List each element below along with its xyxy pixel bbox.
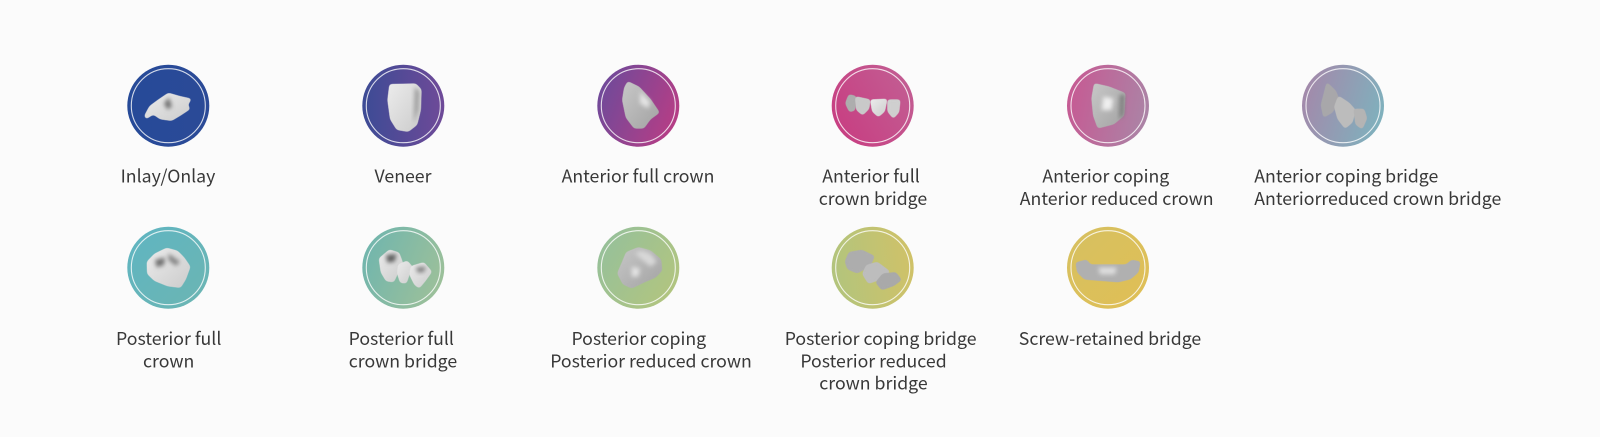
item: Posterior full crown: crown [143,348,194,374]
icon: anterior full crown [597,65,679,147]
item: Veneer [362,65,444,189]
icon: posterior coping [597,227,679,309]
icon: veneer [362,65,444,147]
label: Posterior coping bridge [785,325,977,351]
icon: screw-retained bridge [1067,227,1149,309]
item: Posterior coping bridge / reduced crown bridge: crown bridge [819,370,928,396]
item: Anterior coping bridge / reduced crown bridge: Anteriorreduced crown bridge [1254,185,1501,211]
item: Anterior full crown bridge: crown bridge [819,185,927,211]
item: Posterior coping / reduced crown: Posterior reduced crown [550,348,752,374]
item: Posterior coping bridge / reduced crown bridge: Posterior reduced [800,348,947,374]
item: Inlay/Onlay [121,65,215,189]
icon: anterior coping bridge [1302,65,1384,147]
icon: anterior full crown bridge [832,65,914,147]
item: Posterior coping bridge / reduced crown bridge [785,227,977,396]
icon: posterior coping bridge [832,227,914,309]
item: Posterior full crown bridge: crown bridge [349,348,457,374]
icon: posterior full crown [127,227,209,309]
label: Veneer [375,163,432,189]
label: Anterior coping bridge [1254,163,1439,189]
item: Anterior coping / reduced crown: Anterior reduced crown [1020,185,1214,211]
label: Posterior full [349,325,454,351]
item: Posterior full crown bridge [349,227,457,374]
item: Anterior full crown bridge [819,65,927,211]
item: Screw-retained bridge [1019,227,1201,351]
label: Anterior full [822,163,920,189]
label: Posterior full [116,325,221,351]
label: Anterior full crown [562,163,714,189]
icon: anterior coping [1067,65,1149,147]
label: Screw-retained bridge [1019,325,1201,351]
item: Posterior full crown [116,227,221,374]
item: Anterior coping bridge / reduced crown bridge [1254,65,1501,211]
icon: inlay/onlay [127,65,209,147]
icon: posterior full crown bridge [362,227,444,309]
label: Posterior coping [571,325,706,351]
item: Anterior full crown [562,65,714,189]
label: Inlay/Onlay [121,163,215,189]
item: Posterior coping / reduced crown [550,227,752,374]
item: Anterior coping / reduced crown [1020,65,1214,211]
label: Anterior coping [1042,163,1169,189]
